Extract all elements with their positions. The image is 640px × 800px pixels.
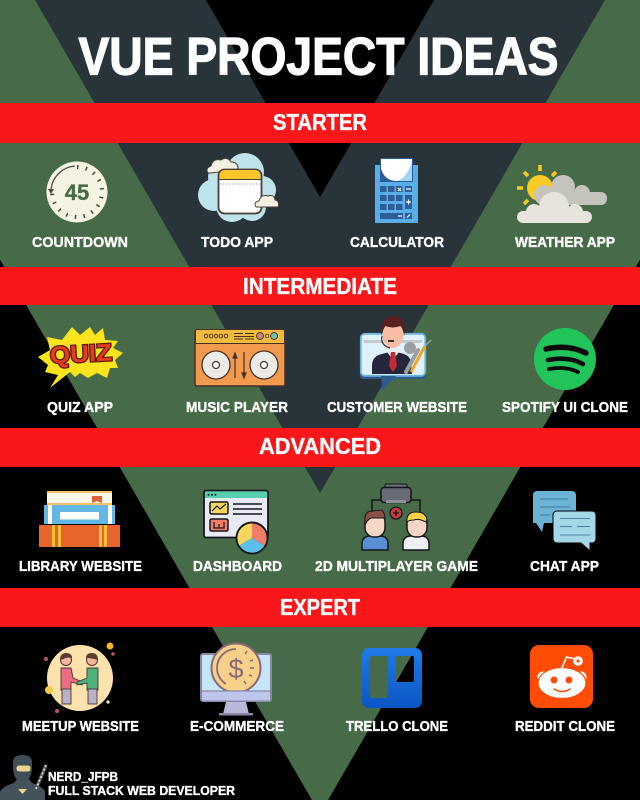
label: calculator: CALCULATOR xyxy=(350,234,444,251)
credit: handle: NERD_JFPB xyxy=(48,769,118,784)
label: meetup website: MEETUP WEBSITE xyxy=(22,718,139,735)
section band: expert xyxy=(0,588,640,627)
icon: reddit logo xyxy=(530,645,593,708)
section band: intermediate xyxy=(0,267,640,305)
item: reddit clone xyxy=(515,645,615,735)
item: calculator xyxy=(350,158,444,251)
label: spotify ui clone: SPOTIFY UI CLONE xyxy=(502,399,628,416)
item: customer website xyxy=(327,316,467,416)
icon: calendar on cloud xyxy=(198,153,279,222)
item: e-commerce xyxy=(190,644,284,735)
icon: ninja xyxy=(0,755,46,800)
icon: two players and vr headset xyxy=(362,484,429,550)
title: VUE PROJECT IDEAS xyxy=(78,28,558,86)
item: trello clone xyxy=(346,648,448,735)
icon: calculator xyxy=(375,158,418,223)
label: 2d multiplayer game: 2D MULTIPLAYER GAME xyxy=(315,558,478,575)
icon: chat bubbles xyxy=(533,491,596,551)
item: countdown xyxy=(32,162,128,251)
icon: sun and clouds xyxy=(517,165,607,223)
label: todo app: TODO APP xyxy=(201,234,273,251)
label: music player: MUSIC PLAYER xyxy=(186,399,288,416)
label: e-commerce: E-COMMERCE xyxy=(190,718,284,735)
icon: dashboard window with pie chart xyxy=(204,490,268,554)
section band: advanced xyxy=(0,428,640,467)
label: weather app: WEATHER APP xyxy=(515,234,615,251)
item: 2d multiplayer game xyxy=(315,484,478,575)
item: spotify ui clone xyxy=(502,328,628,416)
label: reddit clone: REDDIT CLONE xyxy=(515,718,615,735)
item: chat app xyxy=(530,491,599,575)
section band: starter: STARTER xyxy=(273,109,367,135)
icon: handshake xyxy=(44,642,115,713)
icon: stacked books xyxy=(39,491,120,547)
item: todo app xyxy=(198,153,279,251)
item: library website xyxy=(19,491,142,575)
section band: intermediate: INTERMEDIATE xyxy=(243,273,397,299)
section band: starter xyxy=(0,103,640,143)
item: weather app xyxy=(515,165,615,251)
icon: dj mixer xyxy=(195,330,285,386)
label: countdown: COUNTDOWN xyxy=(32,234,128,251)
panel: starter xyxy=(0,103,640,251)
footer: author credit xyxy=(0,755,236,800)
section band: expert: EXPERT xyxy=(280,594,360,620)
section band: advanced: ADVANCED xyxy=(259,433,381,459)
icon: spotify logo xyxy=(534,328,596,390)
label: customer website: CUSTOMER WEBSITE xyxy=(327,399,467,416)
panel: expert xyxy=(0,588,640,735)
panel: intermediate xyxy=(0,267,640,416)
label: library website: LIBRARY WEBSITE xyxy=(19,558,142,575)
label: chat app: CHAT APP xyxy=(530,558,599,575)
item: music player xyxy=(186,330,288,416)
item: meetup website xyxy=(22,642,139,735)
credit: role: FULL STACK WEB DEVELOPER xyxy=(48,783,236,798)
label: quiz app: QUIZ APP xyxy=(47,399,113,416)
icon: monitor with dollar coin: $ xyxy=(228,654,244,684)
panel: advanced xyxy=(0,428,640,575)
label: dashboard: DASHBOARD xyxy=(193,558,282,575)
item: dashboard xyxy=(193,490,282,575)
icon: quiz burst: QUIZ xyxy=(49,339,113,370)
icon: support agent on screen xyxy=(360,316,431,391)
icon: countdown clock: 45 xyxy=(65,180,89,205)
icon: trello logo xyxy=(362,648,422,708)
item: quiz app xyxy=(38,327,123,416)
label: trello clone: TRELLO CLONE xyxy=(346,718,448,735)
